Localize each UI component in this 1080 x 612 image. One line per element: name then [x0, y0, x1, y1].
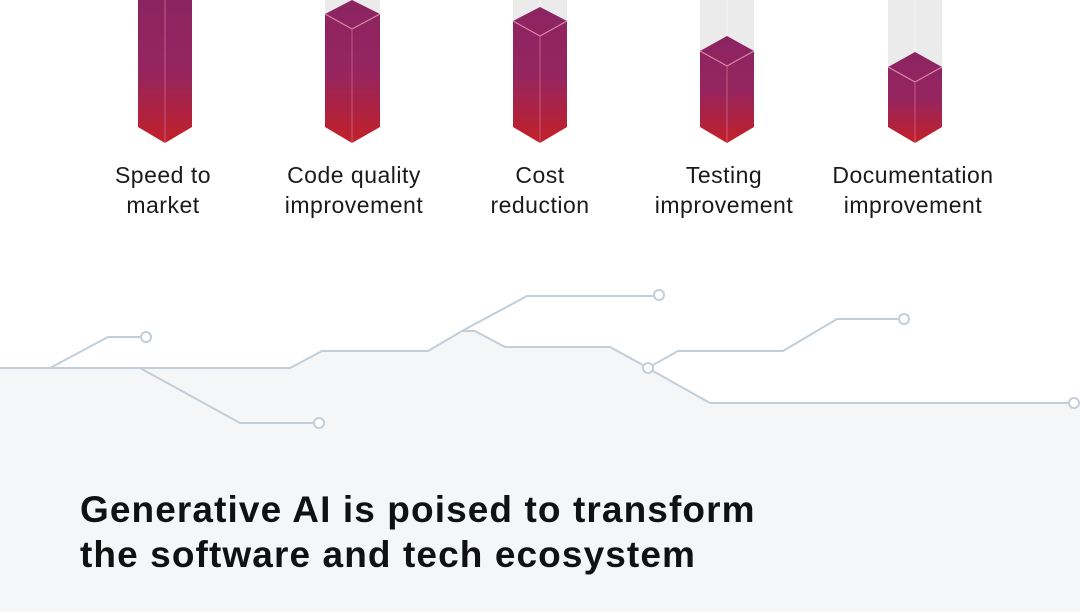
label: documentation improvement: improvement — [844, 192, 982, 218]
label: code quality improvement: improvement — [285, 192, 423, 218]
label: documentation improvement: Documentation — [832, 162, 994, 188]
label: cost reduction — [490, 162, 590, 218]
bar: cost reduction — [513, 0, 567, 143]
label: testing improvement: Testing — [686, 162, 762, 188]
label: speed to market: market — [126, 192, 200, 218]
circuit background fill — [0, 331, 1080, 612]
bar: speed to market — [138, 0, 192, 143]
title — [80, 489, 756, 575]
label: speed to market — [115, 162, 211, 218]
label: code quality improvement: Code quality — [287, 162, 421, 188]
bar: testing improvement — [700, 0, 754, 143]
label: cost reduction: reduction — [490, 192, 590, 218]
title: the software and tech ecosystem — [80, 534, 696, 575]
circuit lines — [0, 290, 1079, 428]
label: documentation improvement — [832, 162, 994, 218]
label: speed to market: Speed to — [115, 162, 211, 188]
label: code quality improvement — [285, 162, 423, 218]
title: Generative AI is poised to transform — [80, 489, 756, 530]
label: testing improvement — [655, 162, 793, 218]
bar: code quality improvement — [325, 0, 380, 143]
label: testing improvement: improvement — [655, 192, 793, 218]
label: cost reduction: Cost — [515, 162, 565, 188]
bar: documentation improvement — [888, 0, 942, 143]
